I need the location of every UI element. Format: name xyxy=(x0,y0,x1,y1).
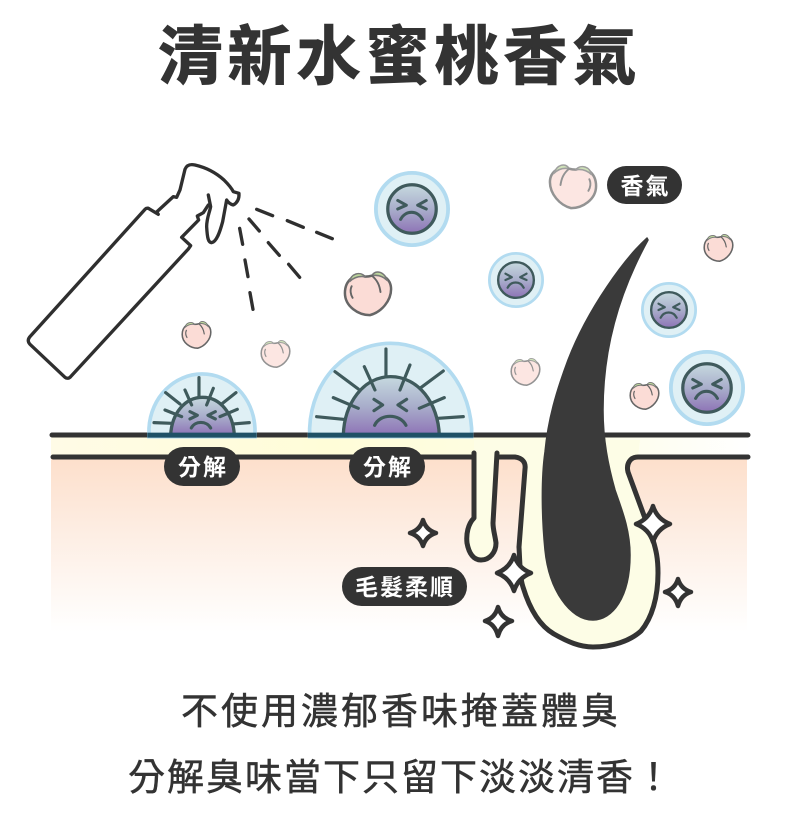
odor molecule: right lower xyxy=(671,352,743,424)
oil layer between lines xyxy=(51,437,750,457)
peach: faded centre xyxy=(511,358,540,385)
sparkles xyxy=(410,506,691,636)
label: 毛髮柔順 xyxy=(342,567,467,606)
odor molecule: top centre xyxy=(376,173,448,245)
peach: top right xyxy=(704,234,733,261)
odor molecule: mid xyxy=(489,253,543,307)
skin cross-section diagram xyxy=(51,238,750,647)
caption: 分解臭味當下只留下淡淡清香！ xyxy=(128,757,674,798)
odor molecule: right upper xyxy=(642,283,696,337)
skin layer xyxy=(51,457,747,633)
hair strand xyxy=(542,238,648,620)
small dissolving odor dome xyxy=(147,374,257,438)
peach: near hair xyxy=(630,382,659,409)
spray bottle xyxy=(28,165,332,378)
caption: 不使用濃郁香味掩蓋體臭 xyxy=(181,691,621,732)
label: 香氣 xyxy=(607,166,682,204)
spray dashes xyxy=(240,209,332,309)
peach: fragrance label xyxy=(550,165,596,208)
peach: faded centre-left xyxy=(261,340,290,367)
peach: left small xyxy=(182,321,211,348)
label: 分解 left: 分解 xyxy=(178,454,228,480)
follicle and gland fill xyxy=(467,440,658,647)
label: 分解 right: 分解 xyxy=(363,454,413,480)
peach: large near spray xyxy=(345,272,391,315)
label: 香氣: 香氣 xyxy=(620,173,670,199)
caption xyxy=(128,691,674,798)
label: 分解 right xyxy=(349,447,425,486)
large dissolving odor dome xyxy=(308,343,473,438)
label: 毛髮柔順: 毛髮柔順 xyxy=(355,574,455,600)
follicle and gland outlines xyxy=(52,435,748,647)
title: 清新水蜜桃香氣 xyxy=(158,21,642,93)
label: 分解 left xyxy=(164,447,240,486)
